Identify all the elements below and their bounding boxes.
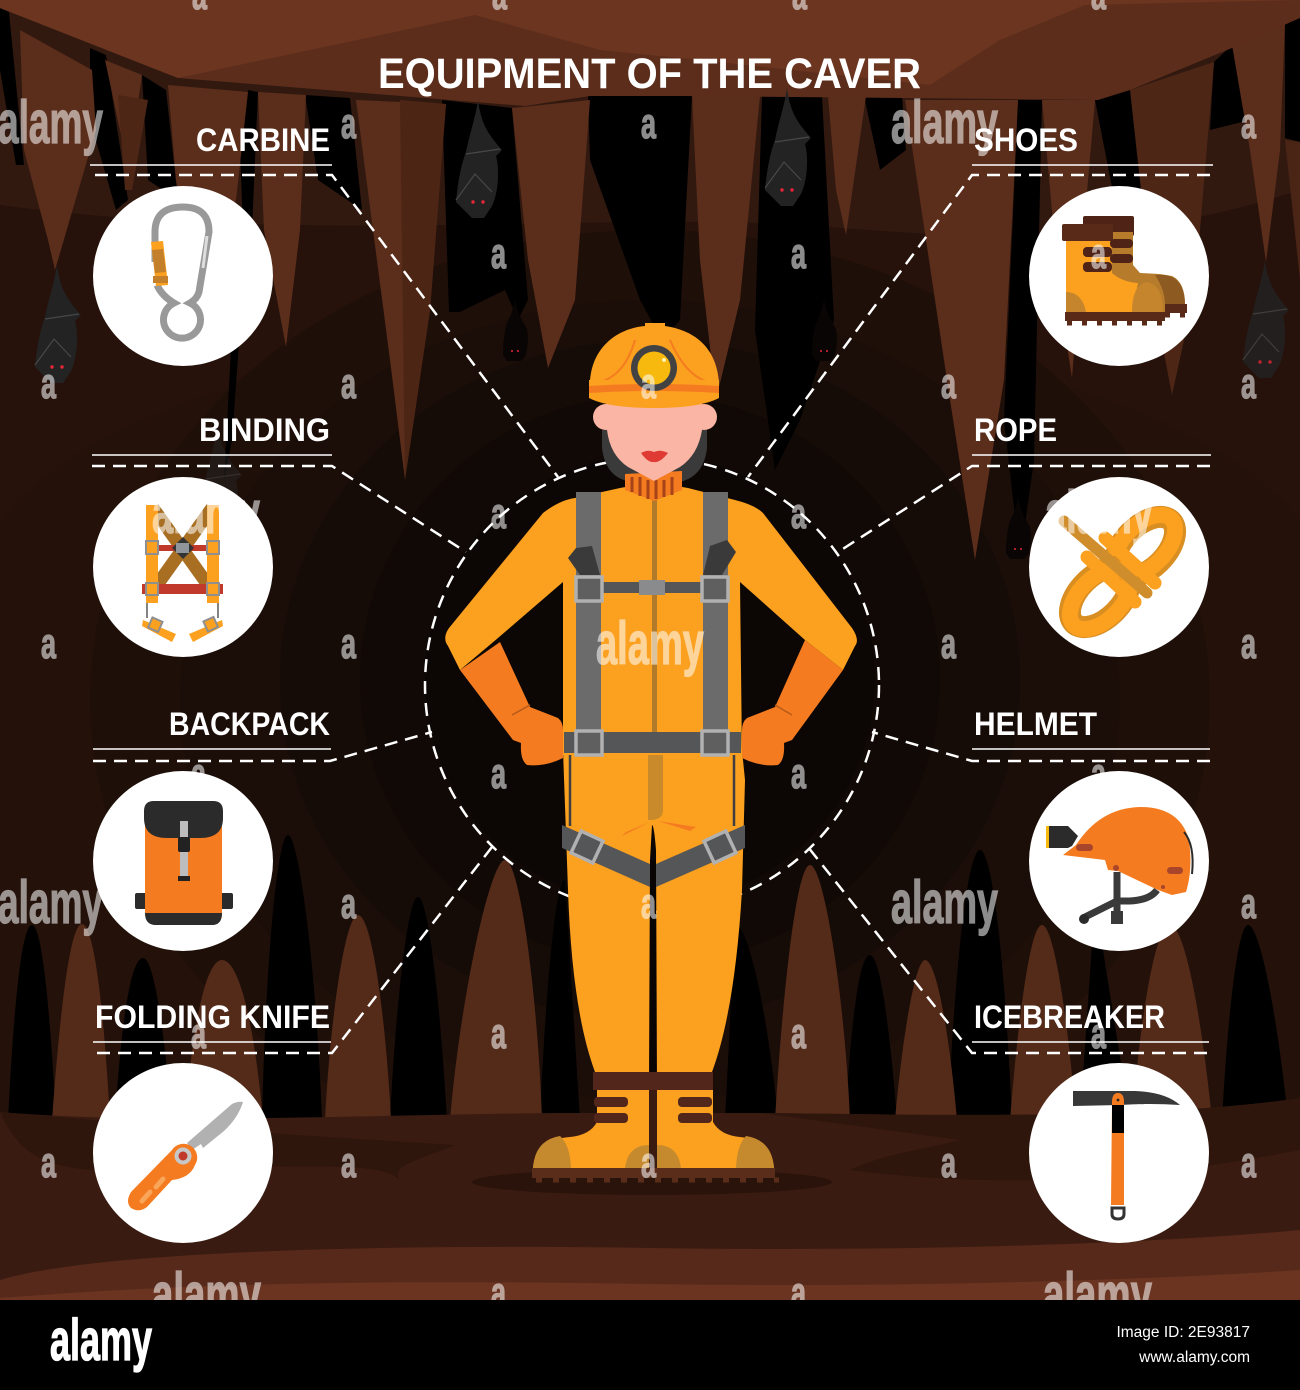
watermarks: alamy xyxy=(891,869,998,936)
watermarks: alamy xyxy=(0,89,103,156)
watermarks: a xyxy=(1241,100,1257,148)
label: folding knife: FOLDING KNIFE xyxy=(95,999,330,1035)
boots xyxy=(532,1072,779,1180)
gloves xyxy=(460,640,843,765)
watermarks: a xyxy=(41,1139,57,1187)
dashed circle around the caver xyxy=(425,458,879,912)
label: carbine: CARBINE xyxy=(196,122,330,158)
label: rope: ROPE xyxy=(974,412,1057,448)
watermarks: a xyxy=(1091,750,1107,798)
lips xyxy=(641,451,668,462)
watermarks: a xyxy=(341,1139,357,1187)
watermarks: a xyxy=(41,360,57,408)
icon: backpack xyxy=(135,801,233,925)
chest harness xyxy=(564,492,741,755)
label: backpack: BACKPACK xyxy=(169,706,330,742)
hair xyxy=(602,430,707,482)
watermarks: a xyxy=(791,490,807,538)
alamy logo: alamy xyxy=(50,1308,152,1373)
legs xyxy=(563,750,745,1072)
stalagmites xyxy=(8,835,1288,1120)
watermarks: alamy xyxy=(152,1261,261,1328)
website: www.alamy.com xyxy=(1138,1349,1250,1366)
watermarks: a xyxy=(191,1010,207,1058)
watermarks: a xyxy=(491,750,507,798)
label: icebreaker: ICEBREAKER xyxy=(974,999,1165,1035)
watermarks: a xyxy=(641,1139,657,1187)
watermarks: a xyxy=(1241,620,1257,668)
watermarks: a xyxy=(641,880,657,928)
torso and sleeves xyxy=(445,482,857,755)
icon: ice pick xyxy=(1073,1091,1180,1219)
collar xyxy=(625,471,682,501)
watermarks: alamy xyxy=(152,479,260,546)
watermarks: a xyxy=(491,1269,507,1317)
watermarks: a xyxy=(791,1010,807,1058)
watermarks: a xyxy=(41,620,57,668)
watermarks: alamy xyxy=(1043,1261,1152,1328)
watermarks: a xyxy=(491,230,507,278)
bottom credit bar xyxy=(0,1300,1300,1390)
floor shadow xyxy=(472,1169,832,1195)
watermarks: alamy xyxy=(1045,479,1153,546)
zipper xyxy=(652,500,657,732)
black stalactites xyxy=(0,8,1300,560)
watermarks: a xyxy=(341,620,357,668)
bats hanging from ceiling xyxy=(35,88,1289,559)
icon: harness binding xyxy=(142,505,223,642)
title: EQUIPMENT OF THE CAVER xyxy=(378,50,921,98)
watermarks: a xyxy=(1241,360,1257,408)
image id: Image ID: 2E93817 xyxy=(1116,1324,1250,1341)
watermarks: alamy xyxy=(596,610,704,677)
ceiling xyxy=(0,0,1300,106)
watermarks: alamy xyxy=(891,89,998,156)
label: helmet: HELMET xyxy=(974,706,1097,742)
solid label underlines xyxy=(90,165,1213,1042)
icon: folding knife xyxy=(128,1102,243,1210)
caver figure xyxy=(445,323,857,1195)
watermarks: a xyxy=(1091,230,1107,278)
watermarks: a xyxy=(341,360,357,408)
watermarks: a xyxy=(791,750,807,798)
watermarks: a xyxy=(641,360,657,408)
thigh harness xyxy=(562,825,745,887)
icon: climbing helmet xyxy=(1046,807,1193,924)
watermarks: a xyxy=(941,620,957,668)
watermarks: alamy xyxy=(0,869,103,936)
watermarks: a xyxy=(1241,1139,1257,1187)
icon: boot xyxy=(1062,216,1187,323)
icon: carabiner xyxy=(151,207,209,338)
trouser details xyxy=(570,753,734,1072)
ears and face xyxy=(593,400,717,481)
watermarks: a xyxy=(341,100,357,148)
watermarks: a xyxy=(1091,1010,1107,1058)
label: shoes: SHOES xyxy=(974,122,1078,158)
watermarks: a xyxy=(791,230,807,278)
watermarks: a xyxy=(191,750,207,798)
white icon circles xyxy=(93,186,1209,1243)
label: binding: BINDING xyxy=(199,412,330,448)
hard hat xyxy=(589,323,719,408)
watermarks: a xyxy=(1241,880,1257,928)
watermarks: a xyxy=(341,880,357,928)
brown stalactites xyxy=(20,22,1300,560)
watermarks: a xyxy=(491,1010,507,1058)
watermarks: a xyxy=(941,1139,957,1187)
cave floor xyxy=(0,1098,1300,1300)
watermarks: a xyxy=(491,490,507,538)
watermarks: a xyxy=(941,360,957,408)
watermarks: a xyxy=(641,100,657,148)
dashed connector lines xyxy=(92,175,1210,1053)
icon: coiled rope xyxy=(1059,504,1186,640)
watermarks: a xyxy=(791,1269,807,1317)
